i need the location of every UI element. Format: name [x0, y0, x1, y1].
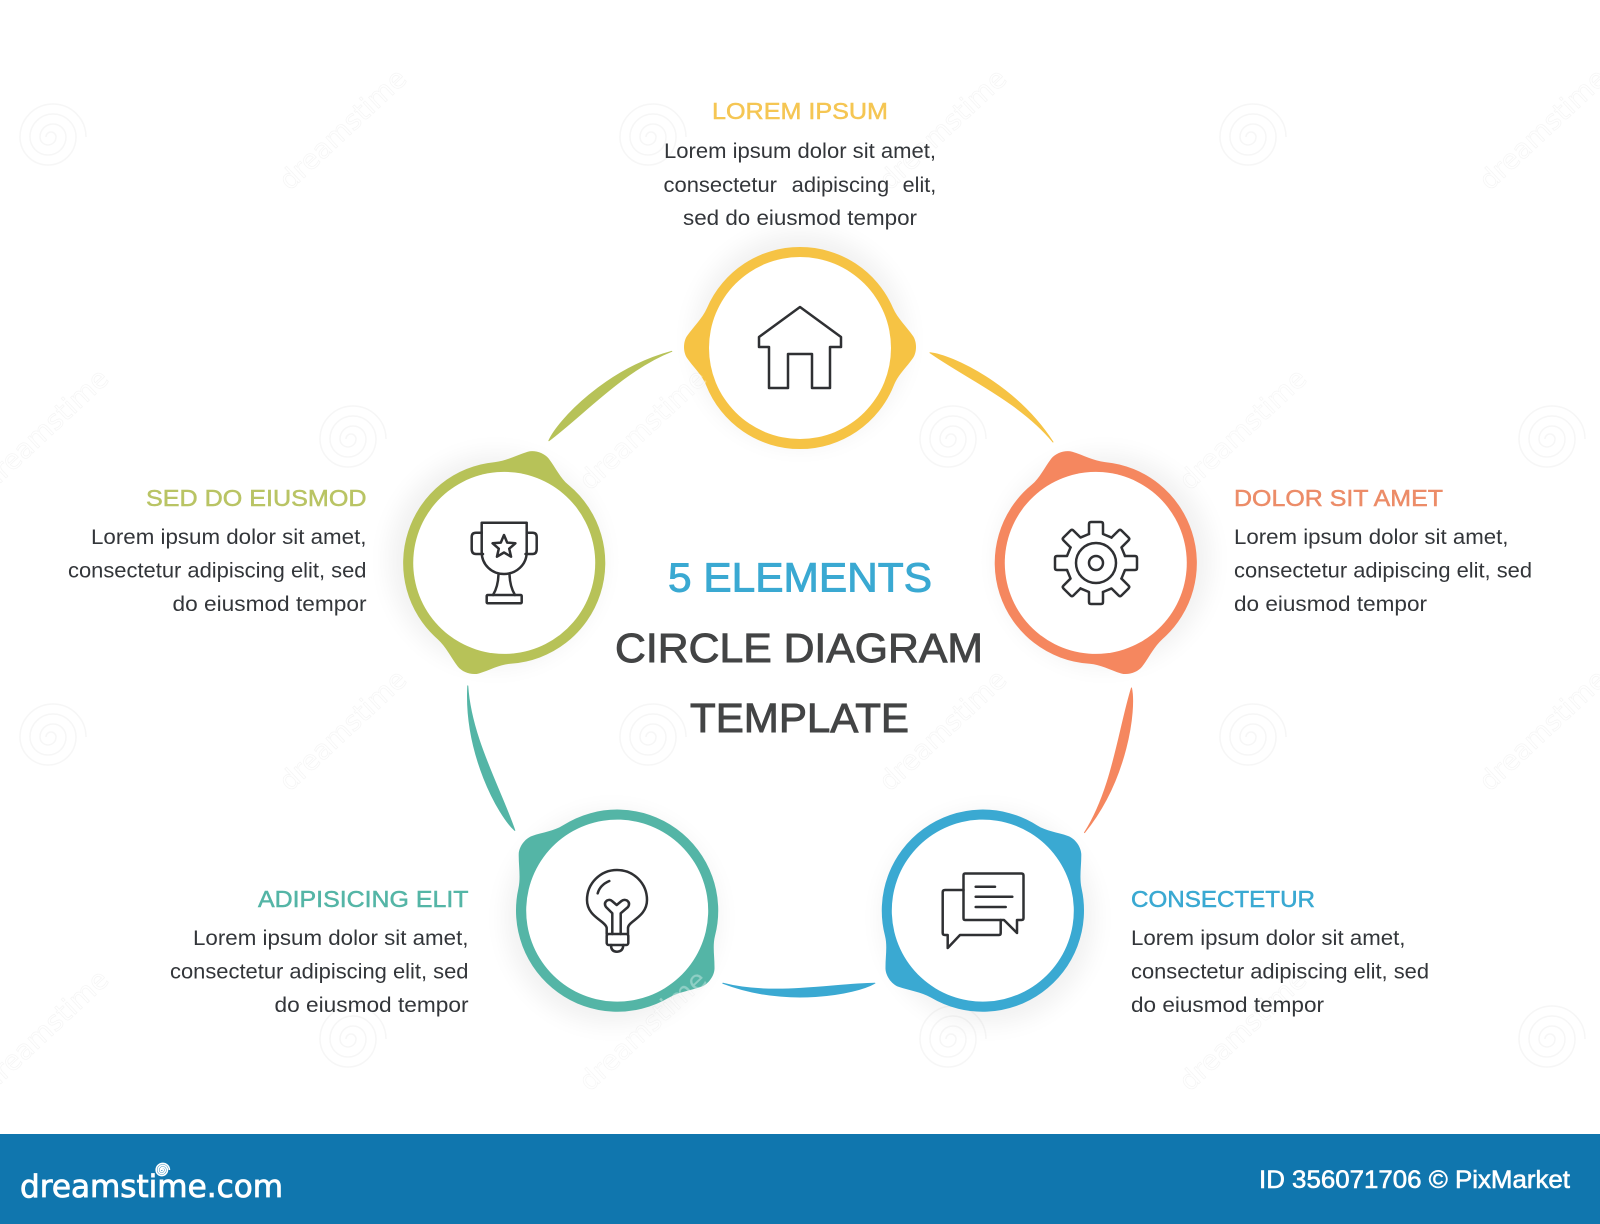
- infographic: dreamstime: [573, 964, 713, 1097]
- body text: adipisicing elit: [170, 927, 469, 1017]
- body text: lorem ipsum: sed do eiusmod tempor: [683, 207, 917, 230]
- body text: adipisicing elit: Lorem ipsum dolor sit amet,: [193, 927, 468, 950]
- circle node: teal: [456, 761, 770, 1072]
- body text: adipisicing elit: do eiusmod tempor: [274, 994, 469, 1017]
- infographic: dreamstime: [573, 363, 713, 496]
- infographic: dreamstime: [573, 363, 713, 496]
- body text: dolor sit amet: [1234, 526, 1532, 616]
- body text: sed do eiusmod: [68, 526, 367, 616]
- icon: light bulb: [587, 870, 647, 952]
- infographic: dreamstime: [873, 664, 1013, 797]
- title line: template: TEMPLATE: [690, 695, 909, 741]
- body text: consectetur: do eiusmod tempor: [1131, 994, 1324, 1017]
- center title: [615, 555, 983, 741]
- body text: sed do eiusmod: Lorem ipsum dolor sit amet,: [91, 526, 366, 549]
- text block: dolor sit amet: [1234, 485, 1532, 616]
- body text: dolor sit amet: do eiusmod tempor: [1234, 593, 1427, 616]
- body text: sed do eiusmod: consectetur adipiscing elit, sed: [68, 560, 366, 582]
- body text: dolor sit amet: Lorem ipsum dolor sit amet,: [1234, 526, 1508, 549]
- heading: lorem ipsum: LOREM IPSUM: [712, 98, 888, 124]
- body text: consectetur: [1131, 927, 1429, 1017]
- connector arc: orange: [1047, 688, 1169, 833]
- connector arc: yellow: [930, 353, 1053, 442]
- icon: gear: [1055, 522, 1137, 604]
- infographic: dreamstime: [273, 63, 413, 196]
- text block: sed do eiusmod: [68, 485, 367, 616]
- body text: lorem ipsum: [664, 140, 936, 230]
- body text: consectetur: consectetur adipiscing elit, sed: [1131, 960, 1429, 984]
- body text: consectetur: Lorem ipsum dolor sit amet,: [1131, 927, 1406, 950]
- infographic: dreamstime: [273, 664, 413, 797]
- heading: dolor sit amet: DOLOR SIT AMET: [1234, 485, 1443, 511]
- title line: circle diagram: CIRCLE DIAGRAM: [615, 625, 983, 671]
- body text: dolor sit amet: consectetur adipiscing elit, sed: [1234, 560, 1532, 582]
- icon: chat bubbles: [943, 874, 1024, 948]
- footer image id: ID 356071706 © PixMarket: [1259, 1166, 1570, 1194]
- text block: adipisicing elit: [170, 886, 469, 1017]
- body text: lorem ipsum: adipiscing: [792, 174, 889, 197]
- connector arc: blue: [723, 911, 875, 1056]
- circle node: yellow: [684, 233, 916, 449]
- body text: lorem ipsum: Lorem ipsum dolor sit amet,: [664, 140, 936, 163]
- infographic: dreamstime: [1173, 363, 1313, 496]
- text block: lorem ipsum: [664, 98, 936, 230]
- circle node: olive: [359, 417, 636, 704]
- circle node: blue: [830, 761, 1144, 1072]
- infographic: dreamstime: [1173, 363, 1313, 496]
- footer band: [0, 1134, 1600, 1224]
- heading: sed do eiusmod: SED DO EIUSMOD: [146, 485, 366, 511]
- heading: consectetur: CONSECTETUR: [1131, 886, 1315, 912]
- body text: lorem ipsum: elit,: [903, 174, 936, 197]
- infographic: dreamstime: [573, 964, 713, 1097]
- connector arc: olive: [549, 324, 672, 468]
- circle node: orange: [964, 417, 1241, 704]
- body text: adipisicing elit: consectetur adipiscing elit, sed: [170, 960, 468, 984]
- text block: consectetur: [1131, 886, 1429, 1017]
- title line: 5 elements: 5 ELEMENTS: [668, 555, 932, 601]
- icon: trophy: [472, 523, 537, 603]
- icon: house: [759, 307, 841, 388]
- infographic: dreamstime: [1173, 964, 1313, 1097]
- body text: lorem ipsum: consectetur: [664, 174, 777, 197]
- footer logo: dreamstime.com: [20, 1169, 283, 1205]
- infographic: dreamstime: [873, 63, 1013, 196]
- connector arc: teal: [415, 686, 567, 830]
- body text: sed do eiusmod: do eiusmod tempor: [172, 593, 367, 616]
- heading: adipisicing elit: ADIPISICING ELIT: [258, 886, 468, 912]
